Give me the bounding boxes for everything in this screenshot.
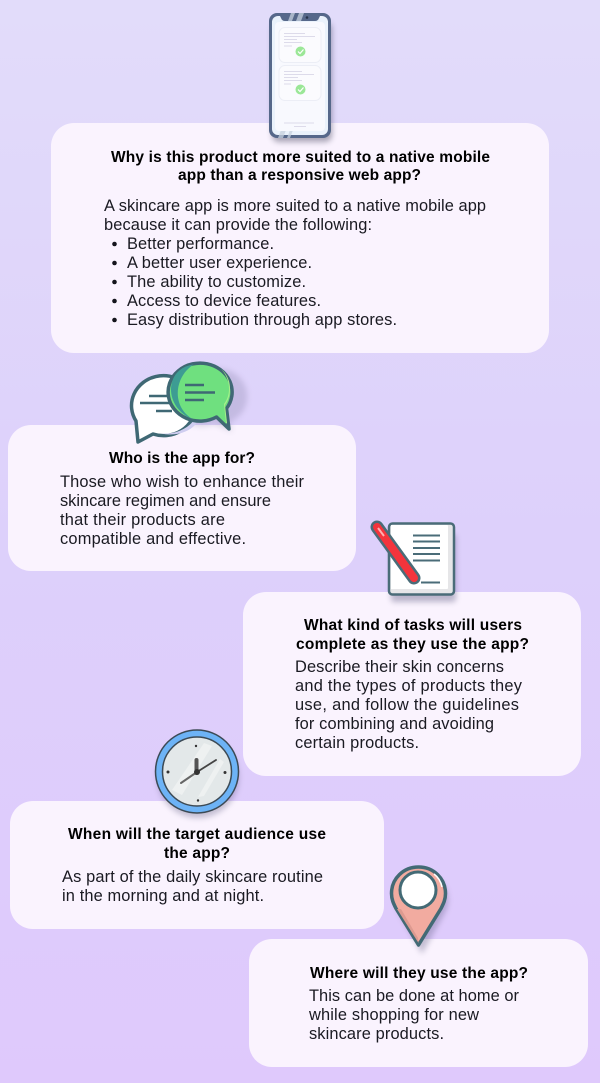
- heading: tasks question: [296, 617, 529, 653]
- text block: audience answer: skincare regimen and ensure: [60, 492, 271, 510]
- icon: clock: [156, 730, 239, 818]
- heading: when question: When will the target audience use: [68, 826, 326, 843]
- text block: tasks answer: Describe their skin concerns: [295, 658, 504, 676]
- panel: who is the app for: [8, 425, 356, 571]
- text block: native app answer: A skincare app is more suited to a native mobile app: [104, 197, 486, 215]
- heading: tasks question: What kind of tasks will users: [304, 617, 522, 634]
- text block: where answer: This can be done at home or: [309, 987, 520, 1005]
- icon: smartphone: [269, 13, 332, 142]
- text block: native app answer: Better performance.: [127, 235, 274, 253]
- text block: where answer: skincare products.: [309, 1025, 444, 1043]
- icon: document and pen: [377, 524, 456, 602]
- text block: native app answer: [104, 197, 486, 329]
- text block: where answer: while shopping for new: [308, 1006, 479, 1024]
- panel: tasks: [243, 592, 581, 776]
- text block: audience answer: compatible and effective.: [60, 530, 246, 548]
- text block: when answer: [62, 868, 323, 905]
- heading: native app question: Why is this product more suited to a native mobile: [111, 149, 490, 166]
- heading: audience: Who is the app for?: [109, 450, 255, 467]
- panel: native mobile app: [51, 123, 549, 353]
- text block: tasks answer: use, and follow the guidelines: [295, 696, 519, 714]
- heading: native app question: app than a responsive web app?: [178, 167, 421, 184]
- text block: audience answer: that their products are: [60, 511, 225, 529]
- text block: native app answer: Easy distribution through app stores.: [127, 311, 397, 329]
- icon: location pin: [392, 867, 448, 954]
- text block: audience answer: [60, 473, 305, 548]
- heading: tasks question: complete as they use the app?: [296, 636, 529, 653]
- text block: native app answer: because it can provide the following:: [104, 216, 372, 234]
- text block: native app answer: The ability to customize.: [127, 273, 306, 291]
- text block: audience answer: Those who wish to enhance their: [60, 473, 305, 491]
- text block: when answer: As part of the daily skincare routine: [62, 868, 323, 886]
- heading: where question: Where will they use the app?: [310, 965, 528, 982]
- heading: when question: the app?: [164, 845, 230, 862]
- panel: when: [10, 801, 384, 929]
- text block: when answer: in the morning and at night.: [62, 887, 264, 905]
- heading: when question: [68, 826, 326, 862]
- text block: tasks answer: and the types of products they: [295, 677, 523, 695]
- text block: where answer: [308, 987, 520, 1043]
- text block: native app answer: Access to device features.: [127, 292, 321, 310]
- text block: tasks answer: [295, 658, 523, 752]
- text block: tasks answer: certain products.: [295, 734, 419, 752]
- icon: speech bubbles: [132, 363, 247, 442]
- text block: tasks answer: for combining and avoiding: [295, 715, 494, 733]
- heading: native app question: [111, 149, 490, 184]
- text block: native app answer: A better user experience.: [127, 254, 312, 272]
- panel: where: [249, 939, 588, 1067]
